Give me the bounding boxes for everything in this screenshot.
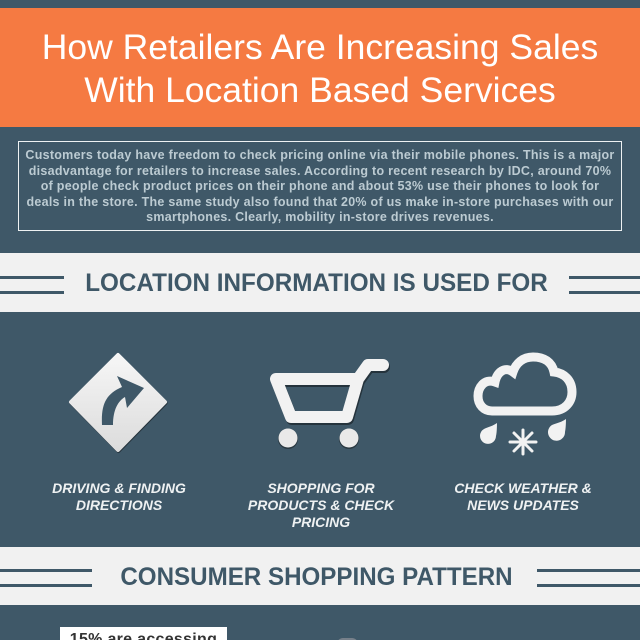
icon: shopping cart: [270, 359, 390, 449]
icon: cloud with rain and snow: [474, 352, 576, 456]
caption: weather: [454, 480, 592, 513]
chart top edge: [337, 638, 358, 640]
caption: directions: [52, 480, 186, 513]
caption: directions: DIRECTIONS: [76, 497, 162, 513]
intro paragraph: of people check product prices on their phone and about 53% use their phones to look for: [41, 179, 599, 193]
title text: With Location Based Services: [84, 70, 556, 110]
section heading: CONSUMER SHOPPING PATTERN: [120, 563, 513, 591]
caption: shopping: SHOPPING FOR: [267, 480, 375, 496]
intro paragraph: smartphones. Clearly, mobility in-store drives revenues.: [146, 210, 494, 224]
title banner: [0, 8, 640, 127]
intro text box: [18, 141, 622, 231]
caption: weather: CHECK WEATHER &: [454, 480, 592, 496]
intro paragraph: disadvantage for retailers to increase sales. According to recent research by IDC, around 70%: [29, 164, 611, 178]
caption: weather: NEWS UPDATES: [467, 497, 579, 513]
title text: [42, 27, 598, 110]
caption: directions: DRIVING & FINDING: [52, 480, 186, 496]
title text: How Retailers Are Increasing Sales: [42, 27, 598, 67]
caption: shopping: PRICING: [292, 514, 350, 530]
intro paragraph: [25, 148, 615, 224]
intro paragraph: deals in the store. The same study also found that 20% of us make in-store purchases with our: [26, 195, 614, 209]
intro paragraph: Customers today have freedom to check pricing online via their mobile phones. This is a major: [25, 148, 615, 162]
callout: 15% accessing: [60, 627, 227, 640]
caption: shopping: PRODUCTS & CHECK: [248, 497, 394, 513]
section heading: LOCATION INFORMATION IS USED FOR: [85, 269, 548, 297]
caption: shopping: [248, 480, 395, 530]
section band: consumer shopping pattern: [0, 547, 640, 605]
icon: road sign with turn arrow: [68, 352, 168, 453]
section band: location information: [0, 253, 640, 312]
